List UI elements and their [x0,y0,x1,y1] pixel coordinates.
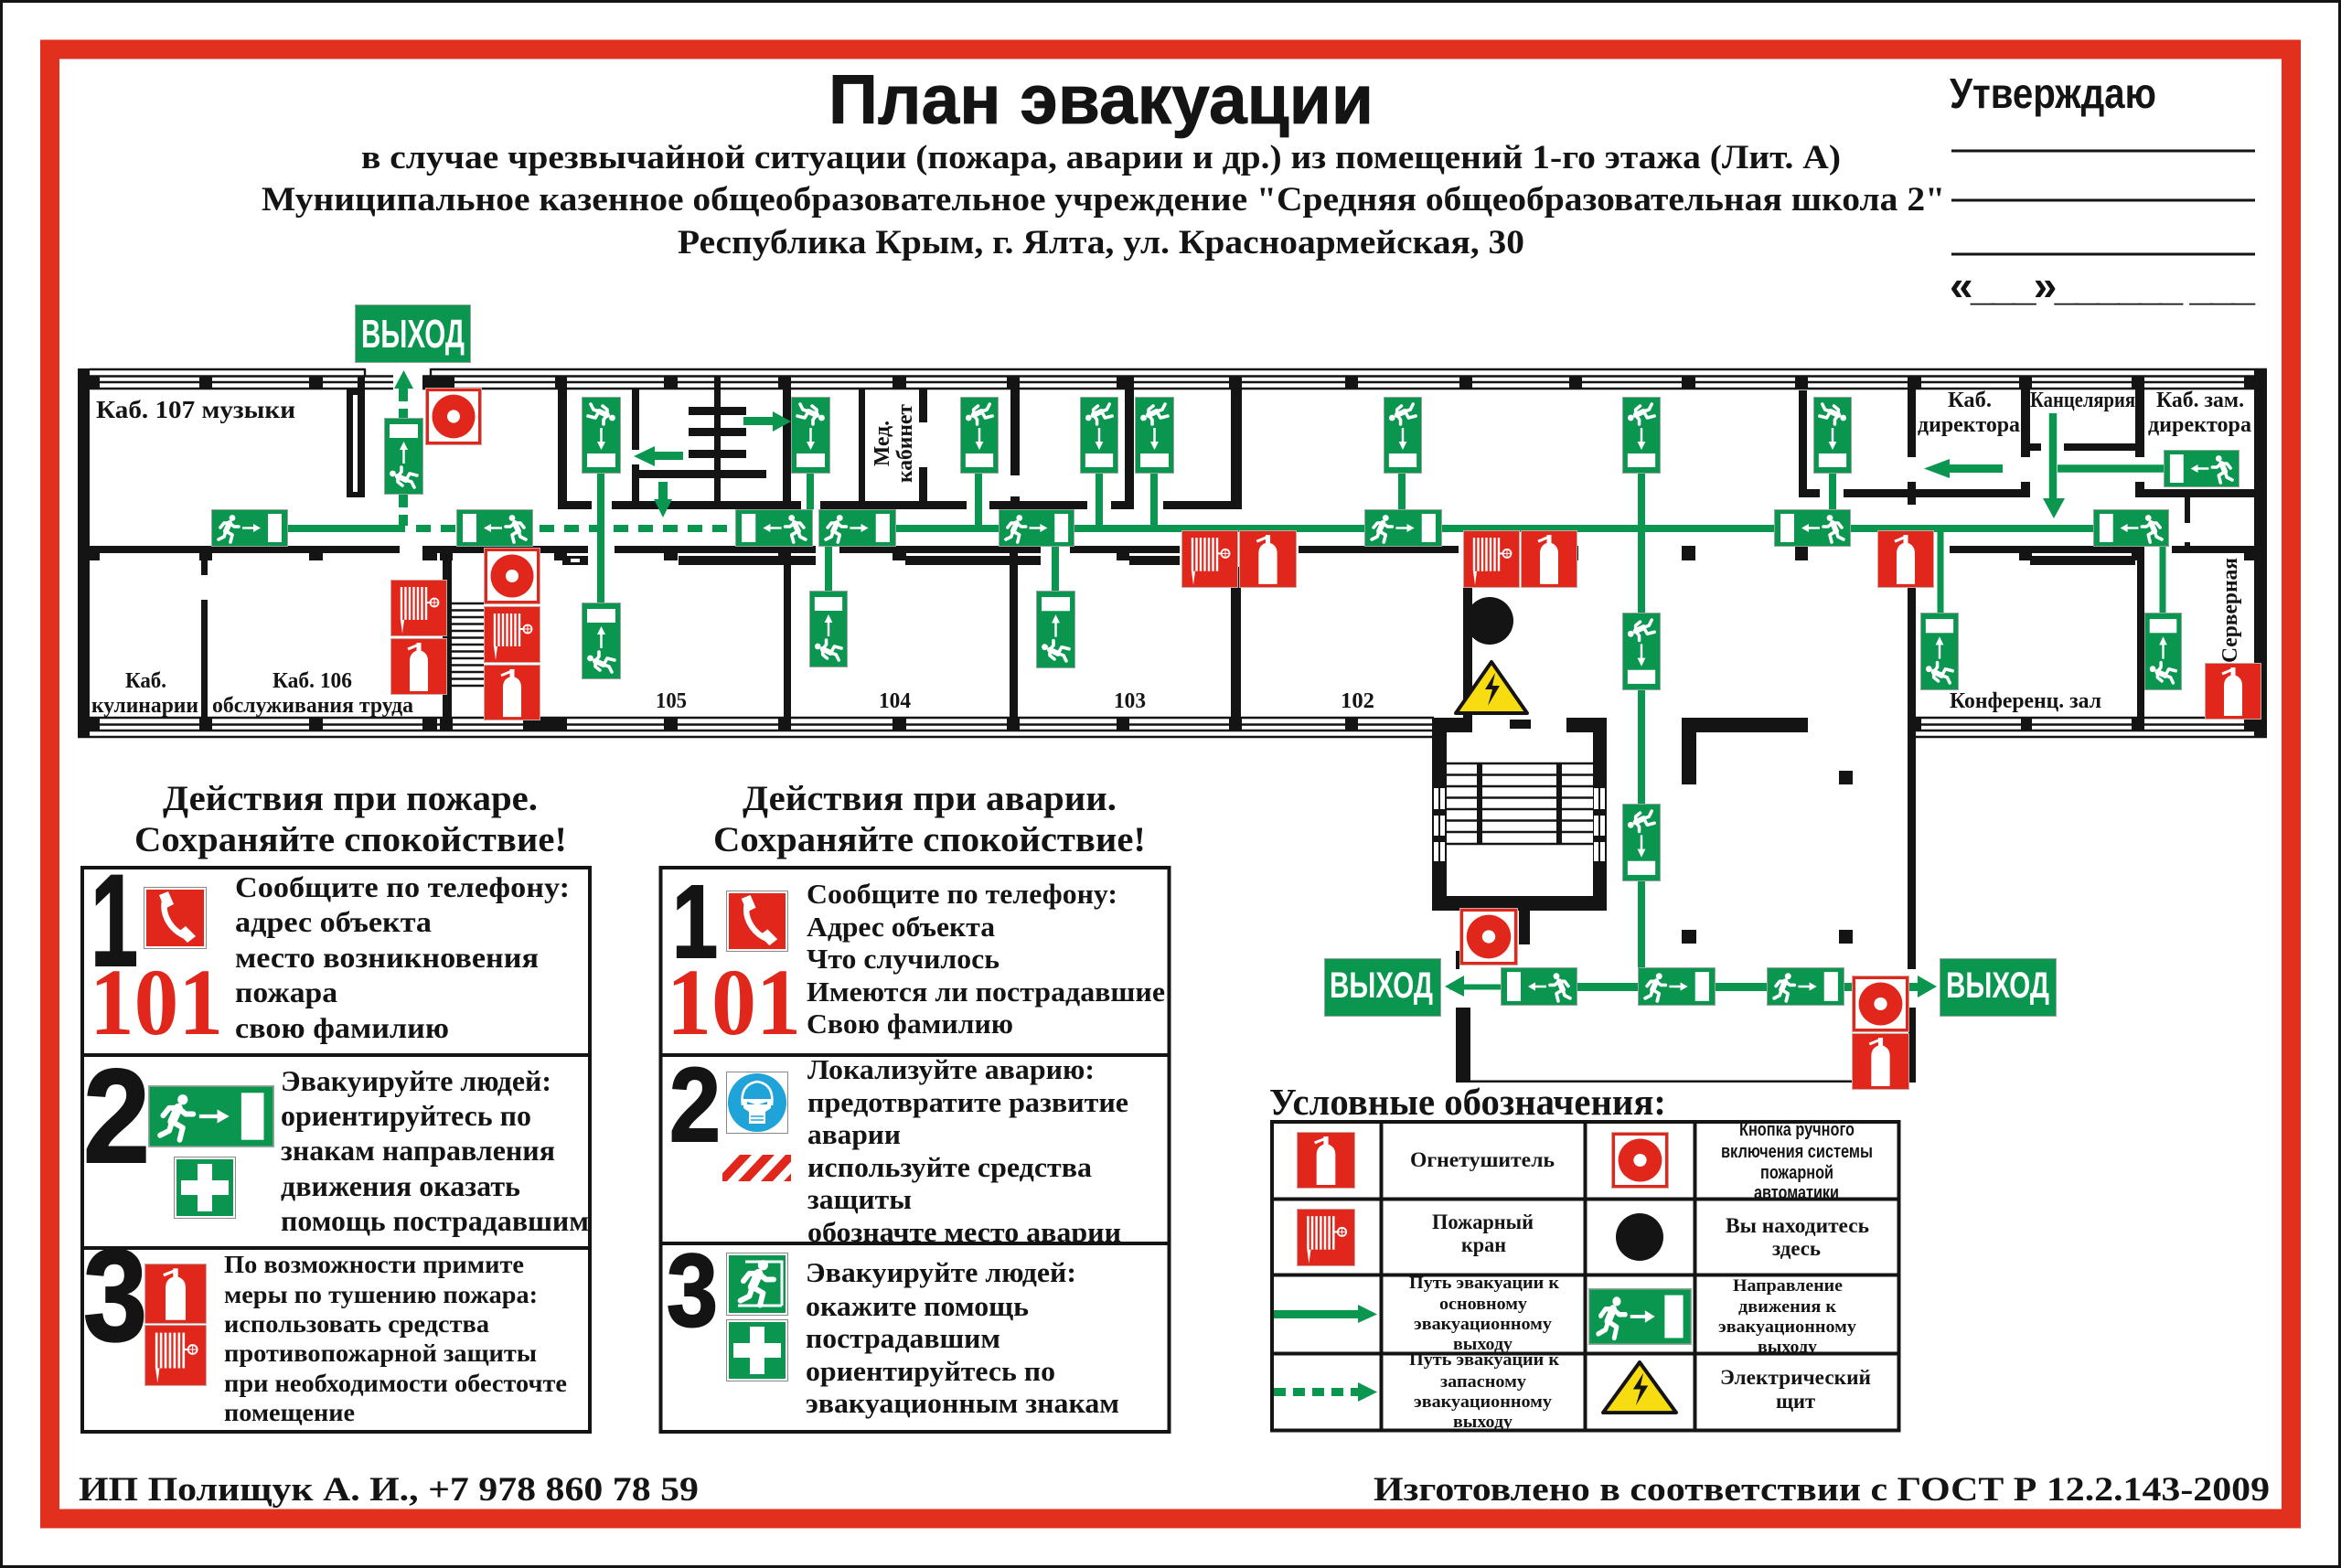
approval date: «___»______ ___ [1950,261,2255,309]
step 2 text: аварии [807,1118,901,1150]
step 3 text: эвакуационным знакам [806,1387,1119,1419]
step 1 text: Сообщите по телефону: [235,870,570,903]
fire heading: Действия при пожаре. [163,779,538,818]
direction signs horizontal [212,450,2239,1005]
exit door icon [726,1253,788,1315]
step 2 text: предотвратите развитие [807,1086,1128,1118]
you are here marker [1466,597,1513,645]
panel: fire actions [82,779,590,1432]
phone icon [144,887,207,949]
approval heading: Утверждаю [1950,69,2156,117]
label button: автоматики [1754,1183,1839,1203]
label main route: выходу [1453,1335,1513,1354]
legend button [1612,1132,1668,1189]
first aid icon [174,1157,236,1218]
fire table frame [82,868,590,1432]
title block [262,61,1945,261]
building walls [78,368,2267,1083]
label main route: эвакуационному [1414,1315,1553,1334]
floor plan [78,305,2267,1090]
step 3 numeral: 3 [667,1232,718,1348]
step 1 text: пожара [235,976,337,1008]
room 106 line 2: обслуживания труда [212,694,413,718]
step 2 text: защиты [807,1183,912,1215]
label here marker [1726,1214,1869,1260]
step 1 text: Свою фамилию [807,1008,1013,1040]
exit sign: top [355,305,470,362]
label electrical: Электрический [1720,1366,1871,1389]
stair core [1434,763,1605,861]
exit direction icon [149,1086,273,1147]
step 2 text: Эвакуируйте людей: [281,1064,551,1097]
label button: пожарной [1760,1163,1833,1183]
cooking room 2: кулинарии [91,694,198,718]
step 2 text: обозначте место аварии [807,1216,1121,1248]
step 3 text: Эвакуируйте людей: [806,1256,1076,1288]
room 102: 102 [1341,689,1374,713]
subtitle line 2: Муниципальное казенное общеобразовательное учреждение "Средняя общеобразовательная школа 2" [262,181,1945,219]
label exit sign: Направление [1733,1276,1843,1296]
accident table frame [660,868,1169,1432]
label exit sign: выходу [1758,1338,1818,1357]
step 3 numeral: 3 [83,1223,147,1369]
step 2 text [807,1053,1128,1248]
step 3 text [806,1256,1119,1419]
approval block [1950,69,2255,309]
step 2 text: ориентируйтесь по [281,1099,531,1132]
legend hose [1298,1210,1354,1265]
medical room 2: кабинет [893,404,917,483]
label main route: Путь эвакуации к [1409,1274,1559,1293]
room labels [91,389,2251,718]
label reserve route: эвакуационному [1414,1392,1553,1412]
hazard stripes [722,1155,791,1181]
step 3 text: противопожарной защиты [224,1339,537,1367]
deputy 2: директора [2148,413,2251,437]
step 3 text: пострадавшим [806,1322,1000,1354]
room 104: 104 [879,689,911,713]
step 3 text: ориентируйтесь по [806,1355,1055,1387]
subtitle line 3: Республика Крым, г. Ялта, ул. Красноармейская, 30 [678,224,1524,261]
step 1 numeral: 1 [91,848,138,994]
arrowheads [394,370,2065,997]
first aid icon [726,1320,788,1381]
accident heading line 2: Сохраняйте спокойствие! [713,820,1146,859]
exit sign: left [1324,958,1441,1017]
step 2 text: помощь пострадавшим [281,1204,589,1237]
subtitle line 1: в случае чрезвычайной ситуации (пожара, аварии и др.) из помещений 1-го этажа (Лит. А) [361,139,1841,176]
accident heading: Действия при аварии. [743,779,1117,818]
label exit sign: движения к [1738,1297,1836,1317]
legend extinguisher [1298,1132,1354,1189]
label here marker: здесь [1772,1237,1821,1260]
step 2 text: движения оказать [281,1169,520,1202]
legend exit sign [1589,1289,1691,1344]
step 2 numeral: 2 [83,1041,150,1190]
step 1 text: адрес объекта [235,905,432,938]
step 1 text [807,878,1165,1040]
evacuation routes [288,389,2164,987]
label electrical: щит [1776,1390,1816,1413]
extinguisher icon [145,1264,206,1323]
electrical panel icon [1456,662,1527,713]
footer left: ИП Полищук А. И., +7 978 860 78 59 [79,1471,699,1509]
deputy: Каб. зам. [2156,389,2244,412]
room 103: 103 [1114,689,1146,713]
room 105: 105 [656,689,687,713]
respirator icon [726,1072,788,1134]
cooking room: Каб. [125,669,166,693]
label hose: кран [1461,1233,1506,1256]
label extinguisher: Огнетушитель [1410,1148,1555,1171]
server room: Серверная [2218,558,2242,663]
hose icon [145,1326,206,1385]
fire heading line 2: Сохраняйте спокойствие! [134,820,567,859]
footer right: Изготовлено в соответствии с ГОСТ Р 12.2.143-2009 [1374,1471,2270,1509]
step 2 text [281,1064,589,1237]
step 2 text: Локализуйте аварию: [807,1053,1095,1085]
legend electrical icon [1603,1362,1676,1413]
step 1 text [235,870,570,1044]
step 2 text: знакам направления [281,1134,555,1167]
label button [1722,1124,1872,1198]
exit sign: top: ВЫХОД [361,312,465,357]
label reserve route [1409,1355,1559,1428]
step 1 text: место возникновения [235,941,539,974]
label reserve route: запасному [1440,1372,1527,1392]
101 number: 101 [90,950,223,1055]
legend here marker [1616,1213,1663,1261]
office: Канцелярия [2030,389,2135,412]
exit sign: right [1940,958,2056,1017]
conference room: Конференц. зал [1950,689,2101,713]
legend [1269,1081,1898,1432]
step 3 text: окажите помощь [806,1290,1029,1322]
legend grid [1272,1122,1898,1430]
step 1 numeral: 1 [672,864,718,979]
step 1 text: Что случилось [807,943,999,975]
step 1 text: Адрес объекта [807,911,996,943]
label reserve route: Путь эвакуации к [1409,1350,1559,1370]
step 3 text: при необходимости обесточте [224,1370,567,1397]
step 3 text [224,1251,567,1426]
medical room: Мед. [871,421,894,466]
step 3 text: меры по тушению пожара: [224,1281,538,1308]
label button: Кнопка ручного [1739,1120,1855,1140]
label hose [1432,1211,1534,1256]
direction signs vertical [384,397,2182,880]
legend reserve route arrow [1274,1382,1377,1402]
step 3 text: использовать средства [224,1310,490,1338]
exit sign: left: ВЫХОД [1330,965,1433,1006]
fire safety signs [391,389,2261,1090]
label main route [1409,1274,1559,1354]
label electrical [1720,1366,1871,1413]
label main route: основному [1439,1295,1528,1314]
panel: accident actions [660,779,1169,1432]
step 2 text: используйте средства [807,1151,1093,1183]
label button: включения системы [1721,1142,1873,1162]
room 106: Каб. 106 [273,669,352,693]
step 1 text: свою фамилию [235,1011,449,1044]
step 3 text: помещение [224,1399,355,1426]
label here marker: Вы находитесь [1726,1214,1869,1237]
step 2 numeral: 2 [669,1047,721,1164]
label reserve route: выходу [1453,1413,1513,1432]
label exit sign [1719,1280,1856,1351]
room 107: Каб. 107 музыки [96,396,295,423]
legend heading: Условные обозначения: [1269,1081,1666,1123]
phone icon [726,891,788,952]
director: Каб. [1948,389,1992,412]
director 2: директора [1918,413,2020,437]
101 number: 101 [667,950,801,1055]
stair treads, left [452,603,484,686]
label exit sign: эвакуационному [1718,1317,1857,1337]
label hose: Пожарный [1432,1211,1534,1233]
exit sign: right: ВЫХОД [1946,965,2049,1006]
step 3 text: По возможности примите [224,1251,524,1278]
step 1 text: Имеются ли пострадавшие [807,976,1165,1008]
legend main route arrow [1274,1305,1377,1323]
step 1 text: Сообщите по телефону: [807,878,1117,910]
title: План эвакуации [828,61,1374,139]
